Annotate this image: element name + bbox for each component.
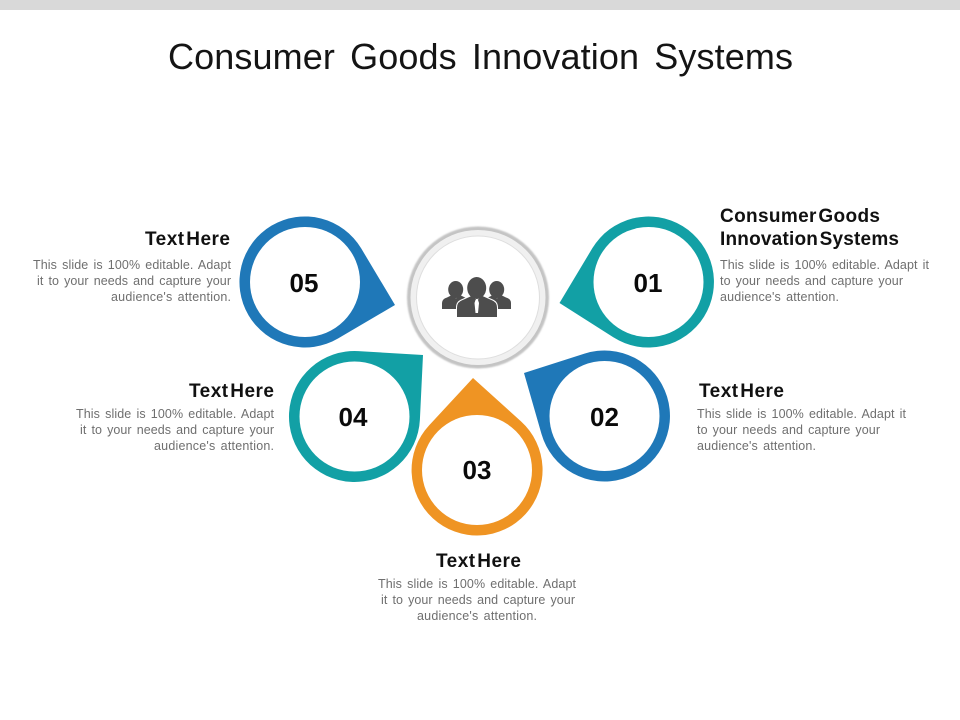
marker 01	[560, 217, 714, 348]
text block 05	[33, 229, 232, 304]
top grey bar	[0, 0, 960, 10]
marker 03	[412, 378, 543, 535]
text block 02	[697, 381, 907, 453]
text block 04: audience's attention.	[154, 439, 274, 453]
text block 01: audience's attention.	[720, 290, 839, 304]
text block 04	[76, 381, 275, 453]
text block 01: This slide is 100% editable. Adapt it	[720, 258, 930, 272]
text block 05: it to your needs and capture your	[37, 274, 231, 288]
text block 03: This slide is 100% editable. Adapt	[378, 577, 577, 591]
text block 05: audience's attention.	[111, 290, 231, 304]
text block 02: This slide is 100% editable. Adapt it	[697, 407, 907, 421]
marker 05: 05	[290, 268, 318, 298]
text block 02: audience's attention.	[697, 439, 816, 453]
marker 04: 04	[339, 402, 368, 432]
text block 03: audience's attention.	[417, 609, 537, 623]
text block 03: it to your needs and capture your	[381, 593, 575, 607]
marker 02: 02	[590, 402, 619, 432]
marker 05	[239, 216, 395, 347]
title: Consumer Goods Innovation Systems	[168, 36, 793, 77]
central circle with team icon	[407, 226, 549, 368]
text block 01: to your needs and capture your	[720, 274, 903, 288]
text block 02: to your needs and capture your	[697, 423, 880, 437]
text block 04: it to your needs and capture your	[80, 423, 274, 437]
marker 04	[289, 351, 423, 482]
marker 01: 01	[634, 268, 662, 298]
text block 04: Text Here	[189, 381, 274, 402]
text block 01	[720, 206, 930, 304]
marker 03: 03	[463, 455, 491, 485]
text block 05: This slide is 100% editable. Adapt	[33, 258, 232, 272]
text block 01: Consumer Goods	[720, 206, 880, 227]
text block 05: Text Here	[145, 229, 230, 250]
marker 02	[524, 350, 670, 481]
text block 03: Text Here	[436, 551, 521, 572]
text block 01: Innovation Systems	[720, 229, 899, 250]
text block 03	[378, 551, 577, 623]
text block 04: This slide is 100% editable. Adapt	[76, 407, 275, 421]
icon: team of three people	[442, 277, 511, 318]
text block 02: Text Here	[699, 381, 784, 402]
